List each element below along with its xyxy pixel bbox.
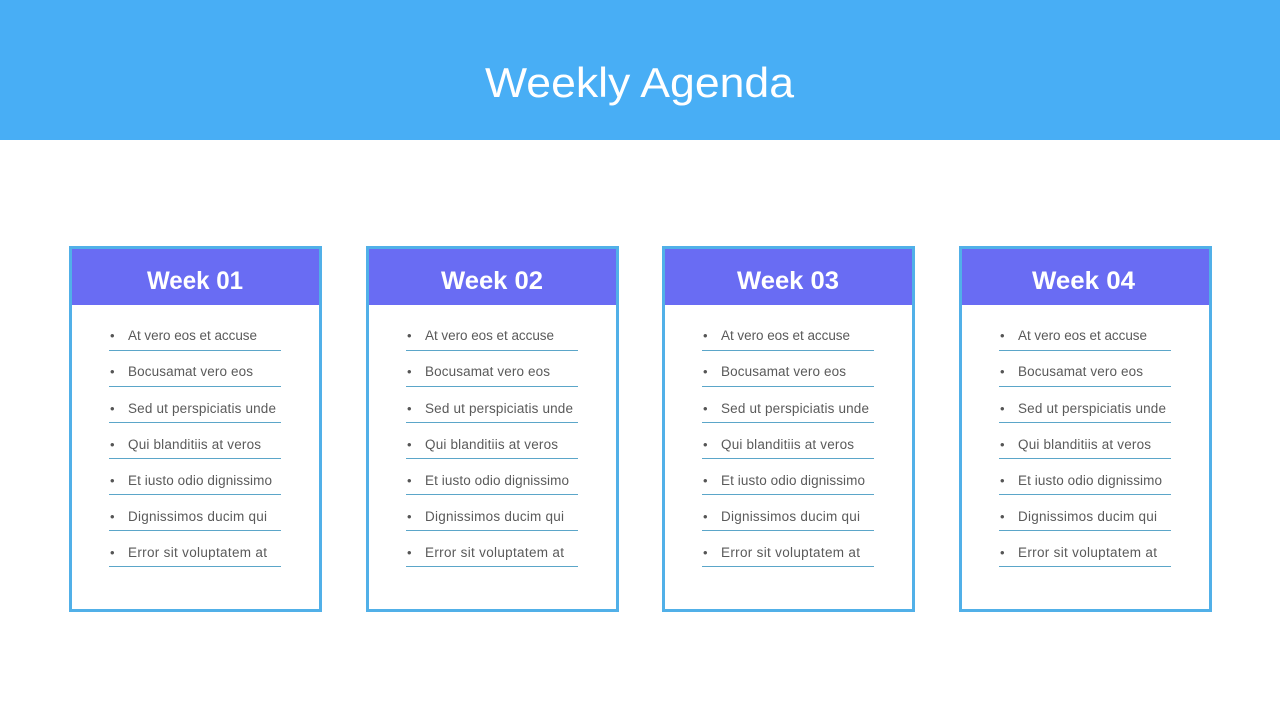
heading: week 01: Week 01 xyxy=(147,267,243,295)
agenda list: week 03: • xyxy=(703,364,708,379)
heading: week 02: Week 02 xyxy=(441,267,543,295)
agenda list: week 04: Dignissimos ducim qui xyxy=(1018,509,1157,524)
agenda list: week 03: Sed ut perspiciatis unde xyxy=(721,401,869,416)
agenda list: week 03: At vero eos et accuse xyxy=(721,328,850,343)
agenda list: week 01: • xyxy=(110,328,115,343)
agenda list: week 04 xyxy=(999,328,1171,566)
agenda list: week 01: • xyxy=(110,509,115,524)
agenda list: week 02 xyxy=(406,328,578,566)
agenda list: week 02: Sed ut perspiciatis unde xyxy=(425,401,573,416)
agenda list: week 03: • xyxy=(703,473,708,488)
agenda list: week 02: • xyxy=(407,473,412,488)
agenda list: week 03: • xyxy=(703,328,708,343)
agenda list: week 03: • xyxy=(703,401,708,416)
agenda list: week 04: Qui blanditiis at veros xyxy=(1018,437,1151,452)
panel: week 04 xyxy=(960,248,1210,610)
agenda list: week 04: Et iusto odio dignissimo xyxy=(1018,473,1162,488)
agenda list: week 02: At vero eos et accuse xyxy=(425,328,554,343)
agenda list: week 04: At vero eos et accuse xyxy=(1018,328,1147,343)
heading: week 04: Week 04 xyxy=(1032,267,1135,295)
agenda list: week 01: Et iusto odio dignissimo xyxy=(128,473,272,488)
agenda list: week 01: • xyxy=(110,545,115,560)
agenda list: week 02: • xyxy=(407,401,412,416)
agenda list: week 03: Et iusto odio dignissimo xyxy=(721,473,865,488)
agenda list: week 02: • xyxy=(407,545,412,560)
agenda list: week 01: • xyxy=(110,473,115,488)
agenda list: week 04: • xyxy=(1000,509,1005,524)
agenda list: week 04: • xyxy=(1000,473,1005,488)
agenda list: week 02: • xyxy=(407,328,412,343)
agenda list: week 02: • xyxy=(407,364,412,379)
agenda list: week 04: Error sit voluptatem at xyxy=(1018,545,1157,560)
heading: week 03: Week 03 xyxy=(737,267,839,295)
agenda list: week 01: Qui blanditiis at veros xyxy=(128,437,261,452)
agenda list: week 04: • xyxy=(1000,401,1005,416)
agenda list: week 02: • xyxy=(407,509,412,524)
agenda list: week 03: Error sit voluptatem at xyxy=(721,545,860,560)
agenda list: week 01: • xyxy=(110,437,115,452)
agenda list: week 03 xyxy=(702,328,874,566)
agenda list: week 03: Dignissimos ducim qui xyxy=(721,509,860,524)
agenda list: week 01 xyxy=(109,328,281,566)
agenda list: week 02: Dignissimos ducim qui xyxy=(425,509,564,524)
agenda list: week 03: Bocusamat vero eos xyxy=(721,364,846,379)
agenda list: week 04: Bocusamat vero eos xyxy=(1018,364,1143,379)
agenda list: week 04: • xyxy=(1000,364,1005,379)
agenda list: week 02: Bocusamat vero eos xyxy=(425,364,550,379)
agenda list: week 02: • xyxy=(407,437,412,452)
panel: week 03 xyxy=(664,248,914,610)
agenda list: week 01: Sed ut perspiciatis unde xyxy=(128,401,276,416)
agenda list: week 01: At vero eos et accuse xyxy=(128,328,257,343)
agenda list: week 03: • xyxy=(703,545,708,560)
agenda list: week 02: Qui blanditiis at veros xyxy=(425,437,558,452)
agenda list: week 01: Error sit voluptatem at xyxy=(128,545,267,560)
agenda list: week 03: • xyxy=(703,437,708,452)
agenda list: week 01: Bocusamat vero eos xyxy=(128,364,253,379)
panel: week 01 xyxy=(70,248,320,610)
agenda list: week 03: • xyxy=(703,509,708,524)
agenda list: week 04: • xyxy=(1000,437,1005,452)
title banner xyxy=(0,0,1280,140)
agenda list: week 04: • xyxy=(1000,545,1005,560)
agenda list: week 04: • xyxy=(1000,328,1005,343)
agenda list: week 04: Sed ut perspiciatis unde xyxy=(1018,401,1166,416)
panel: week 02 xyxy=(368,248,618,610)
agenda list: week 02: Error sit voluptatem at xyxy=(425,545,564,560)
title: Weekly Agenda xyxy=(485,59,795,106)
agenda list: week 01: • xyxy=(110,364,115,379)
agenda list: week 03: Qui blanditiis at veros xyxy=(721,437,854,452)
agenda list: week 01: Dignissimos ducim qui xyxy=(128,509,267,524)
agenda list: week 01: • xyxy=(110,401,115,416)
agenda list: week 02: Et iusto odio dignissimo xyxy=(425,473,569,488)
